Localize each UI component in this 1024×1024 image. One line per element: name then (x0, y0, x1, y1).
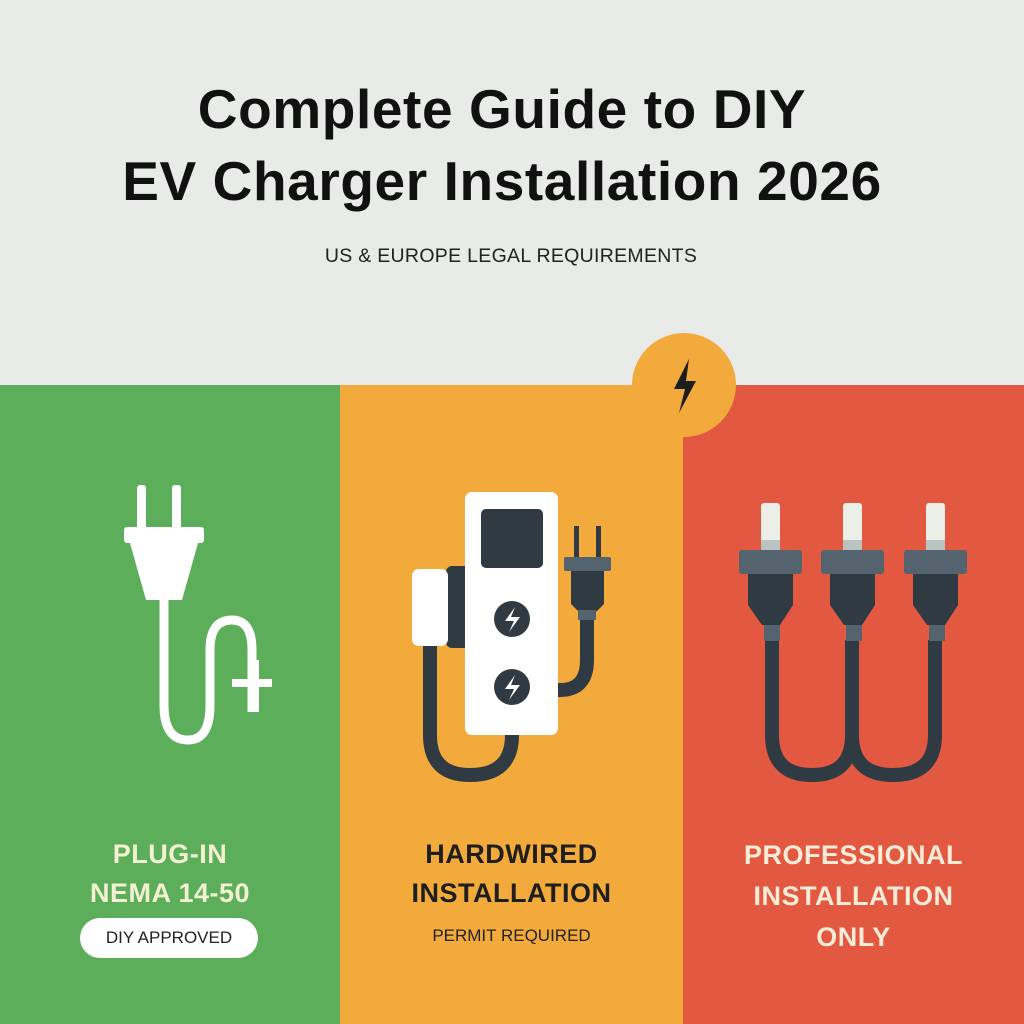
pill: DIY approved (80, 918, 258, 958)
icon: wall charger (412, 492, 611, 782)
panel: professional (683, 385, 1024, 1024)
label: professional installation only: ONLY (816, 922, 891, 952)
label: hardwired installation (412, 839, 611, 908)
label: professional installation only: PROFESSIONAL (744, 840, 963, 870)
label: hardwired installation: INSTALLATION (412, 878, 611, 908)
title: EV Charger Installation 2026 (122, 150, 882, 212)
icon: lightning badge (632, 333, 736, 437)
pill: DIY approved: DIY APPROVED (106, 928, 232, 947)
label: professional installation only: INSTALLATION (754, 881, 953, 911)
icon: three plugs (739, 503, 967, 782)
subtitle: US & EUROPE LEGAL REQUIREMENTS (325, 245, 697, 267)
label: plug-in nema: NEMA 14-50 (90, 878, 250, 908)
label: hardwired installation: HARDWIRED (425, 839, 598, 869)
icon: white plug (124, 485, 272, 744)
panel: plug-in (0, 385, 340, 1024)
label: professional installation only (744, 840, 963, 952)
title (122, 78, 882, 212)
label: plug-in nema: PLUG-IN (113, 839, 227, 869)
panel: hardwired (340, 385, 683, 1024)
label: plug-in nema (90, 839, 250, 908)
label: permit required: PERMIT REQUIRED (432, 926, 591, 945)
title: Complete Guide to DIY (198, 78, 806, 140)
